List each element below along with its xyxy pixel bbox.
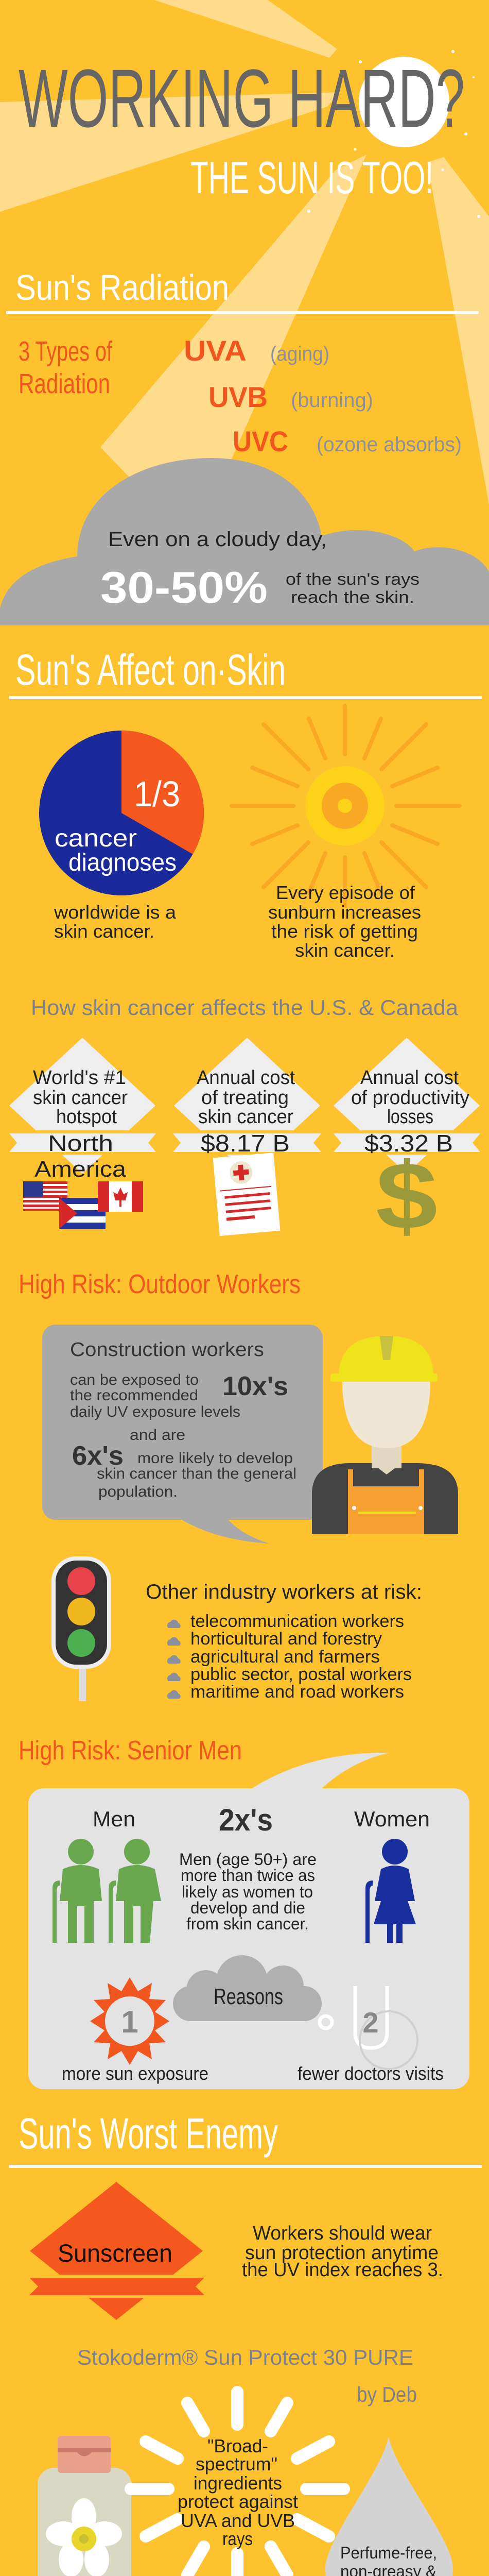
- panel: senior men: Women: [354, 1807, 430, 1831]
- list: other industry workers: [146, 1581, 422, 1702]
- icon: senior woman figure: [365, 1839, 416, 1943]
- icon: water drop: Perfume-free,: [340, 2544, 437, 2562]
- panel: 3 types of radiation: UVB: [208, 381, 268, 413]
- icon: stethoscope 2: 2: [362, 2006, 379, 2039]
- panel: senior men: more sun exposure: [62, 2063, 208, 2084]
- panel: 3 types of radiation: UVC: [233, 425, 288, 457]
- panel: hotspot diamond: North: [48, 1131, 113, 1156]
- list: other industry workers: telecommunication workers: [190, 1612, 404, 1631]
- icon: broad-spectrum sun rays: [131, 2392, 344, 2576]
- panel: 3 types of radiation: UVA: [184, 334, 247, 367]
- panel: senior men: likely as women to: [182, 1883, 313, 1901]
- panel: senior men: 2x's: [219, 1803, 273, 1837]
- text: worldwide skin cancer: [54, 902, 177, 942]
- icon: water drop: [325, 2437, 453, 2576]
- title: [19, 52, 465, 203]
- text: UV index advice: [242, 2223, 443, 2281]
- heading: Sun's Worst Enemy: Sun's Worst Enemy: [19, 2109, 278, 2158]
- text: broad-spectrum: spectrum": [196, 2453, 277, 2475]
- panel: senior men: more than twice as: [181, 1866, 315, 1885]
- panel: 3 types of radiation: [19, 334, 462, 457]
- panel: hotspot diamond: [9, 1038, 156, 1182]
- callout: construction workers bubble: 6x's: [72, 1441, 124, 1471]
- panel: hotspot diamond: hotspot: [56, 1106, 117, 1128]
- text: broad-spectrum: UVA and UVB: [181, 2510, 295, 2531]
- panel: 3 types of radiation: (aging): [270, 343, 329, 365]
- panel: treating cost diamond: of treating: [201, 1087, 289, 1109]
- panel: cloud fact: reach the skin.: [291, 588, 414, 606]
- icon: stethoscope 2: [320, 1986, 417, 2069]
- text: broad-spectrum: "Broad-: [207, 2435, 268, 2456]
- text: UV index advice: the UV index reaches 3.: [242, 2259, 443, 2281]
- panel: hotspot diamond: skin cancer: [33, 1087, 128, 1109]
- pie chart: 1/3 cancer diagnoses: cancer: [55, 825, 137, 852]
- panel: productivity cost diamond: $3.32 B: [364, 1130, 453, 1157]
- pie chart: 1/3 cancer diagnoses: [39, 731, 204, 895]
- panel: senior men: [28, 1753, 469, 2089]
- icon: reasons cloud: Reasons: [214, 1984, 283, 2009]
- panel: treating cost diamond: $8.17 B: [201, 1130, 290, 1157]
- panel: hotspot diamond: America: [34, 1157, 127, 1182]
- heading: High Risk Outdoor Workers: High Risk: Outdoor Workers: [19, 1269, 301, 1299]
- text: sunburn risk: skin cancer.: [295, 940, 395, 961]
- panel: productivity cost diamond: of productivity: [351, 1087, 469, 1109]
- text: broad-spectrum: [178, 2435, 298, 2549]
- panel: 3 types of radiation: (ozone absorbs): [317, 433, 462, 456]
- panel: senior men: Men: [93, 1807, 135, 1831]
- heading: High Risk Senior Men: High Risk: Senior Men: [19, 1736, 242, 1766]
- icon: traffic light: [54, 1558, 109, 1701]
- icon: sunburst 1: [90, 1977, 169, 2065]
- callout: construction workers bubble: Construction workers: [70, 1339, 264, 1361]
- text: worldwide skin cancer: skin cancer.: [54, 921, 154, 942]
- panel: cloud fact: of the sun's rays: [286, 570, 420, 588]
- heading: Sun's Worst Enemy: [9, 2109, 482, 2168]
- icon: reasons cloud: [173, 1955, 322, 2021]
- panel: sunscreen diamond: Sunscreen: [58, 2240, 172, 2267]
- text: broad-spectrum: rays: [222, 2528, 253, 2549]
- icon: construction worker: [312, 1336, 458, 1534]
- panel: treating cost diamond: Annual cost: [197, 1067, 295, 1089]
- subheading: US & Canada: How skin cancer affects the U.S. & Canada: [31, 995, 459, 1020]
- callout: construction workers bubble: and are: [130, 1427, 185, 1444]
- text: broad-spectrum: ingredients: [194, 2472, 282, 2494]
- heading: Sun's Radiation: Sun's Radiation: [15, 267, 229, 308]
- panel: sunscreen diamond: [26, 2182, 211, 2320]
- pie chart: 1/3 cancer diagnoses: diagnoses: [68, 849, 177, 876]
- icon: medical document: [213, 1153, 280, 1236]
- panel: treating cost diamond: skin cancer: [198, 1106, 293, 1128]
- callout: construction workers bubble: 10x's: [222, 1371, 288, 1401]
- product heading: by Deb: [357, 2382, 417, 2406]
- product heading: [77, 2345, 417, 2406]
- sun rays background: [0, 0, 489, 505]
- heading: Sun's Radiation: [6, 267, 479, 314]
- callout: construction workers bubble: [42, 1325, 323, 1544]
- text: sunburn risk: sunburn increases: [268, 902, 421, 923]
- list: other industry workers: agricultural and farmers: [190, 1647, 380, 1667]
- list: other industry workers: public sector, postal workers: [190, 1665, 412, 1684]
- icon: glowing sun: [307, 50, 480, 218]
- panel: productivity cost diamond: Annual cost: [360, 1067, 459, 1089]
- icon: sun with rays: [232, 706, 460, 906]
- icon: flags: [23, 1181, 143, 1229]
- text: worldwide skin cancer: worldwide is a: [54, 902, 177, 923]
- callout: construction workers bubble: population.: [98, 1483, 178, 1500]
- icon: dollar sign: $: [376, 1143, 438, 1249]
- panel: productivity cost diamond: [333, 1038, 482, 1174]
- panel: cloud fact: 30-50%: [100, 563, 268, 613]
- icon: senior men figures: [53, 1839, 161, 1943]
- list: other industry workers: Other industry workers at risk:: [146, 1581, 422, 1603]
- panel: senior men: fewer doctors visits: [298, 2063, 444, 2084]
- panel: senior men: Men (age 50+) are: [179, 1850, 317, 1869]
- callout: construction workers bubble: more likely to develop: [137, 1450, 293, 1467]
- list: other industry workers: maritime and road workers: [190, 1682, 404, 1702]
- callout: construction workers bubble: daily UV exposure levels: [70, 1403, 240, 1420]
- text: UV index advice: sun protection anytime: [245, 2242, 439, 2264]
- panel: 3 types of radiation: (burning): [291, 389, 373, 412]
- heading: Sun's Affect on Skin: Sun's Affect on·Skin: [15, 646, 286, 694]
- panel: cloud fact: [0, 458, 489, 625]
- callout: construction workers bubble: the recommended: [70, 1387, 198, 1404]
- product heading: Stokoderm® Sun Protect 30 PURE: [77, 2345, 413, 2369]
- panel: hotspot diamond: World's #1: [33, 1067, 126, 1089]
- icon: sunburst 1: 1: [121, 2005, 138, 2039]
- text: broad-spectrum: protect against: [178, 2491, 298, 2512]
- text: UV index advice: Workers should wear: [253, 2223, 432, 2244]
- panel: senior men: from skin cancer.: [186, 1914, 309, 1933]
- panel: 3 types of radiation: Radiation: [19, 368, 110, 399]
- callout: construction workers bubble: skin cancer than the general: [97, 1465, 296, 1482]
- text: sunburn risk: the risk of getting: [271, 921, 418, 942]
- callout: construction workers bubble: can be exposed to: [70, 1371, 199, 1388]
- list: other industry workers: horticultural and forestry: [190, 1629, 382, 1649]
- panel: productivity cost diamond: losses: [387, 1106, 433, 1128]
- text: sunburn risk: Every episode of: [276, 882, 415, 903]
- panel: cloud fact: Even on a cloudy day,: [108, 528, 327, 551]
- pie chart: 1/3 cancer diagnoses: 1/3: [134, 774, 180, 814]
- panel: treating cost diamond: [173, 1038, 322, 1174]
- icon: sunscreen bottle: [38, 2436, 131, 2576]
- panel: 3 types of radiation: 3 Types of: [19, 336, 113, 367]
- panel: senior men: develop and die: [190, 1899, 305, 1917]
- text: sunburn risk: [268, 882, 421, 961]
